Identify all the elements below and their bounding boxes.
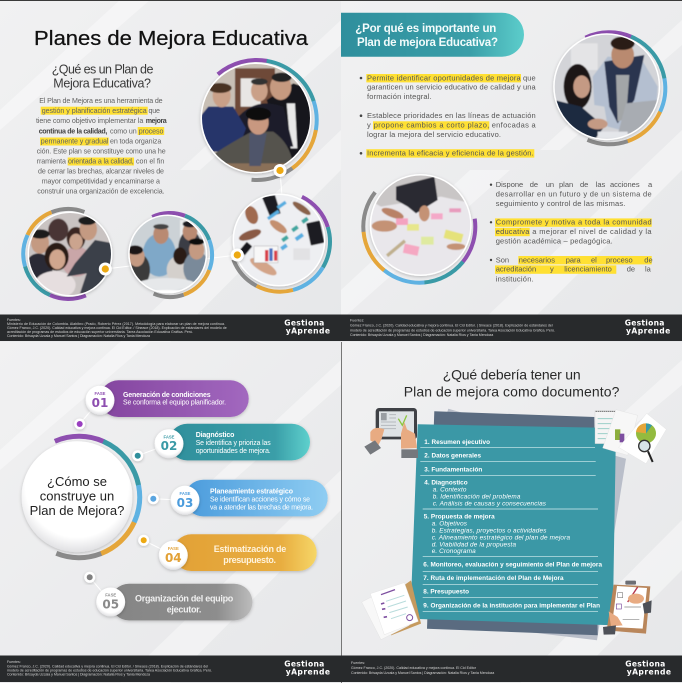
text block: lower bullets: de [580,180,588,189]
text block: top bullets: garanticen un servicio educativo de calidad y una [367,83,537,92]
document contents list: e. Cronograma [432,548,476,555]
footer bar: Gómez Franco, J.C. (2020). Calidad educativa y mejora continua. El Cid Editor. / Sineace (2018). Explicación de estándares del modelo de [7,326,227,330]
document contents list: d. Viabilidad de la propuesta [432,541,516,548]
icon: tablet with hands [364,408,418,458]
text block: definition: orientada a la calidad, [68,158,134,166]
text block: definition: continua de la calidad, [39,127,107,135]
footer bar: Fuentes: [7,318,21,322]
document contents list: b. Estrategias, proyectos o actividades [432,528,547,535]
dot [274,164,286,177]
fase 02: Diagnóstico [196,432,234,439]
text block: lower bullets: a [648,180,653,189]
central circle [0,416,160,578]
text block: lower bullets: la [645,265,652,274]
text block: definition: mayor competitividad y encaminarse a [42,178,160,186]
footer bar: modelo de acreditación de programas de estudios de educación superior universitaria. Tarea Asociación Educativa Gráfica. Perú. [7,668,212,672]
text block: definition: permanente y gradual [41,137,109,145]
document contents list: a. Contexto [433,486,467,493]
dot [99,262,112,276]
photo: group of colleagues [21,206,114,301]
footer bar [341,314,682,341]
fase 03: 03 [177,496,193,510]
text block: lower bullets: proceso [606,255,633,264]
fase 03: Se identifican acciones y cómo se [210,496,310,503]
document contents list: 4. Diagnostico [424,480,468,487]
footer bar: yAprende [286,668,330,676]
fase 05: 05 [102,598,119,612]
document contents list: 3. Fundamentación [424,466,482,473]
title: Planes de Mejora Educativa [34,28,309,50]
text block: definition: ción. Este plan se constituye como una he [37,147,166,155]
footer bar: Contenido: Brisayda Uzcala y Manuel Santos | Diagramación: Natalia Ríos y Tania Mendoza [7,672,150,676]
footer bar: Gómez Franco, J.C. (2020). Calidad educativa y mejora continua. El Cid Editor [351,666,477,670]
fase 04: FASE [168,546,179,551]
title [404,366,620,400]
document contents list: 9. Organización de la institución para implementar el Plan [423,602,600,609]
document contents list: c. Alineamiento estratégico del plan de mejora [432,534,570,541]
text block: top bullets: lograr la mejora del servicio educativo. [367,130,501,139]
footer bar: Gestiona [284,660,324,669]
text block: lower bullets: plan [559,180,573,189]
icon: charts and magnifier [595,410,666,464]
footer bar [0,656,341,682]
text block: definition: gestión y planificación estratégica [42,107,147,115]
fase 01 [74,380,249,430]
heading pill: Plan de mejora Educativa? [357,37,498,49]
text block: definition: rramienta [37,158,66,166]
document contents list [420,439,602,611]
text block: definition: que [148,107,160,115]
document contents list: 8. Presupuesto [423,588,469,595]
text block: top bullets: y [367,121,371,130]
text block: lower bullets: desarrollar en un futuro y de un sistema de [496,189,652,198]
fase 01: Se conforma el equipo planificador. [123,400,226,407]
central circle: Plan de Mejora? [30,503,124,518]
document contents list: b. Identificación del problema [433,493,521,500]
text block: lower bullets: el [591,255,597,264]
text block: definition: como un [110,127,137,135]
text block: lower bullets: educativa [496,227,530,236]
icon: clipboard with hands [603,581,652,635]
footer bar: Contenido: Brisayda Uzcala y Manuel Santos | Diagramación: Natalia Ríos y Tania Mendoza [350,333,493,337]
text block: lower bullets [490,180,653,283]
text block: lower bullets: necesarios [519,255,555,264]
footer bar: Gestiona [625,319,664,328]
footer bar: Contenido: Brisayda Uzcala y Manuel Santos | Diagramación: Natalia Ríos y Tania Mendoza [7,334,150,338]
photo: two women at laptop [552,30,668,146]
fase 04: Estimatización de [214,544,286,554]
central circle: ¿Cómo se [47,474,107,489]
fase 04: presupuesto. [223,555,276,565]
text block: top bullets: propone cambios a corto plazo, [374,121,489,130]
footer bar [0,314,341,341]
photo: team around table [126,211,214,300]
fase 03: FASE [180,491,191,496]
footer bar: Contenido: Brisayda Uzcala y Manuel Santos | Diagramación: Natalia Ríos y Tania Mendoza [351,671,494,675]
fase 04 [138,534,317,571]
text block: lower bullets: de [530,180,538,189]
footer bar: Fuentes: [7,660,21,664]
footer bar: modelo de acreditación de programas de estudios de educación superior universitaria. Tarea Asociación Educativa Gráfica. Perú. [350,328,555,332]
text block: definition: de cerrar las brechas, alcanzar niveles de [38,168,164,176]
footer bar: Gestiona [625,660,665,669]
text block: lower bullets: las [596,180,606,189]
text block: lower bullets: institución. [496,274,534,283]
text block: top bullets: enfocadas a [492,121,537,130]
document contents list: 6. Monitoreo, evaluación y seguimiento del Plan de mejora [423,561,602,568]
photo: planning table [230,164,332,294]
fase 05: FASE [105,593,116,598]
text block: definition: tiene como objetivo implementar la [36,117,143,125]
text block: definition [36,97,167,196]
document contents list: 5. Propuesta de mejora [424,514,495,521]
footer bar: Gestiona [284,319,324,328]
subtitle: ¿Qué es un Plan de [52,62,153,76]
document contents list: a. Objetivos [432,521,468,528]
panel: qué debería tener [341,342,682,683]
text block: lower bullets: y [550,265,554,274]
footer bar: Fuentes: [351,661,365,665]
text block: lower bullets: licenciamiento [564,265,612,274]
footer bar: yAprende [627,668,671,676]
footer bar: Gómez Franco, J.C. (2020). Calidad educativa y mejora continua. El Cid Editor. / Sineace (2018). Explicación de estándares del [7,664,208,668]
photo: meeting at desk [199,58,319,182]
text block: definition: en toda organiza [110,137,161,145]
document contents list: 1. Resumen ejecutivo [424,439,490,446]
text block: definition: con el fin [136,158,164,166]
photo: hands over sticky notes [361,174,478,285]
footer bar: yAprende [286,327,330,336]
text block: lower bullets: seguimiento y control de las mismas. [496,199,625,208]
panel: cómo se construye [0,342,341,683]
text block: lower bullets: de [644,255,653,264]
footer bar: acreditación de programas de estudios de educación superior universitaria. Tarea Asociación Educativa Gráfica. Perú. [7,330,193,334]
central circle: construye un [40,488,114,503]
text block: lower bullets: un [546,180,554,189]
text block: lower bullets: Dispone [496,180,523,189]
text block: lower bullets: acreditación [496,265,536,274]
fase 01: Generación de condiciones [123,392,211,399]
fase 02 [132,424,310,461]
heading pill [341,13,524,57]
subtitle [52,62,153,91]
fase 03: Planeamiento estratégico [210,489,293,496]
subtitle: Mejora Educativa? [53,77,151,91]
document contents list: 2. Datos generales [424,453,481,460]
text block: top bullets: Establece prioridades en las líneas de actuación [367,111,536,120]
heading pill: ¿Por qué es importante un [355,23,496,35]
document contents list: c. Análisis de causas y consecuencias [433,500,547,507]
title: ¿Qué debería tener un [443,366,581,382]
text block: top bullets: formación integral. [367,92,432,101]
text block: top bullets: que [523,73,536,82]
text block: lower bullets: gestión académica – pedagógica. [496,237,613,246]
text block: lower bullets: de [627,265,635,274]
dot [231,248,244,262]
text block: definition: construir una organización de excelencia. [37,188,165,196]
fase 02: Se identifica y prioriza las [196,440,271,447]
fase 05: Organización del equipo [135,593,234,603]
footer bar: Ministerio de Educación de Colombia. Alabibro (Prado, Roberto Pérez (2017). Metodología para elaborar un plan de mejora continua. [7,322,225,326]
text block: lower bullets: para [566,255,582,264]
text block: lower bullets: Compromete y motiva a toda la comunidad [496,218,652,227]
text block: top bullets: Permite identificar oportunidades de mejora [367,73,522,82]
footer bar [341,656,682,682]
title: Plan de mejora como documento? [404,384,620,400]
connector lines [105,171,282,269]
text block: lower bullets: a mejorar el nivel de calidad y la [532,227,652,236]
text block: lower bullets: acciones [610,180,640,189]
fase 05 [84,572,252,620]
document contents list: 7. Ruta de implementación del Plan de Mejora [423,575,564,582]
fase 02: 02 [161,439,177,453]
text block: definition: proceso [139,127,163,135]
fase 03: va a atender las brechas de mejora. [210,505,313,512]
text block: top bullets [360,73,537,158]
fase 03 [148,480,328,516]
fase 05: ejecutor. [167,605,201,615]
footer bar: yAprende [626,327,670,336]
paper stack [410,409,626,640]
text block: definition: mejora [146,117,167,125]
fase 04: 04 [165,551,182,565]
panel: por qué es importante [341,0,682,342]
text block: top bullets: Incrementa la eficacia y eficiencia de la gestión. [367,149,534,158]
text block: definition: El Plan de Mejora es una herramienta de [39,97,163,105]
footer bar: Fuentes: [350,319,364,323]
fase 02: oportunidades de mejora. [196,448,271,455]
fase 01: FASE [95,391,106,396]
fase 02: FASE [164,434,175,440]
connector lines [80,400,185,602]
text block: lower bullets: Son [496,255,509,264]
fase 01: 01 [92,396,108,410]
footer bar: Gómez Franco, J.C. (2020). Calidad educativa y mejora continua. El Cid Editor. | Sineace (2018). Explicación de estándares del [350,324,553,328]
panel: planes de mejora educativa [0,0,349,342]
icon: checklist papers [362,580,421,640]
